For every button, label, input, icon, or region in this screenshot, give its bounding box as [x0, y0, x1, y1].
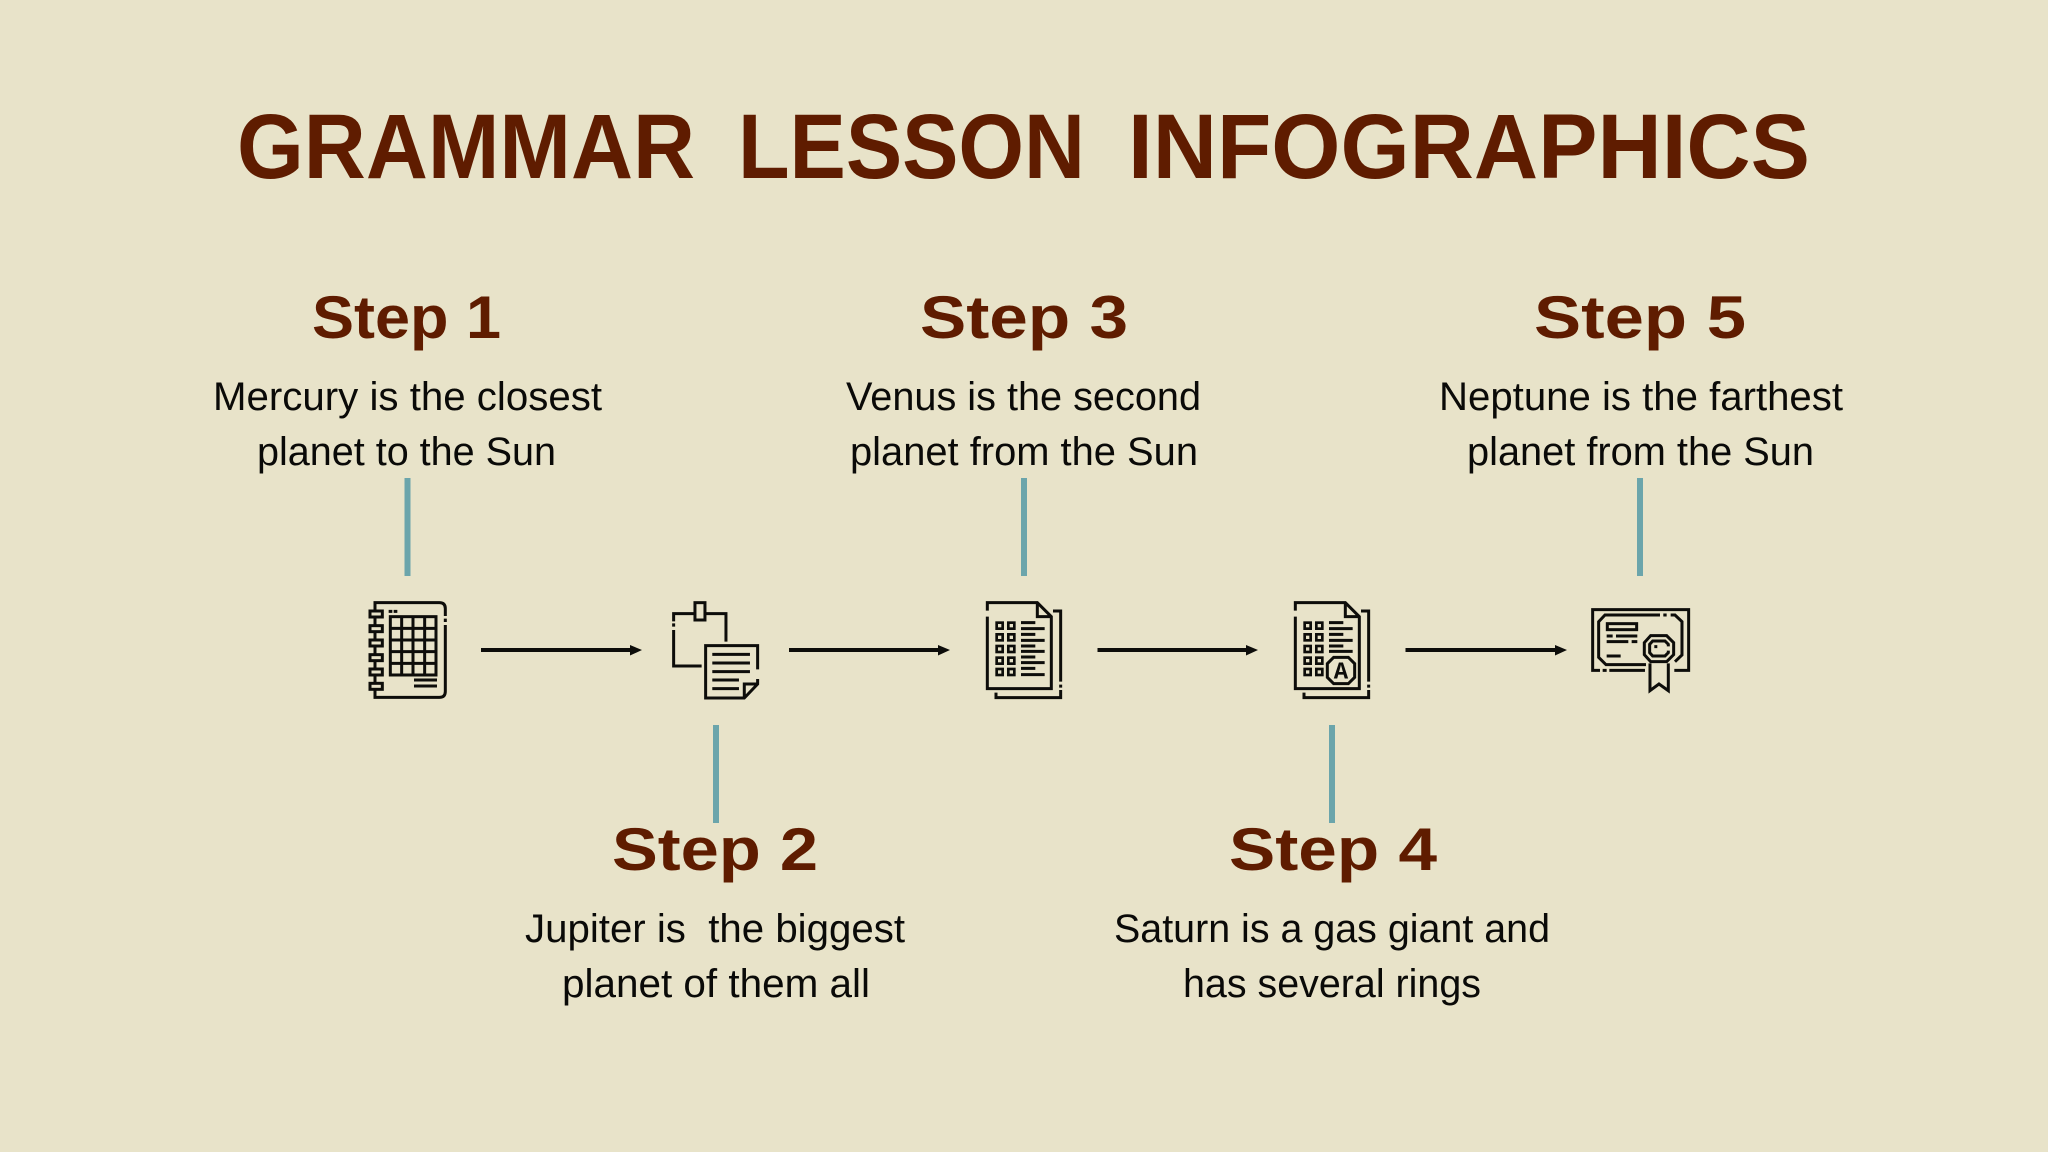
title: LESSON	[738, 96, 1085, 198]
step 5 block: Neptune is the farthest	[1439, 375, 1843, 419]
step 1 block: Step 1	[312, 284, 501, 351]
step 3 block: Step 3	[920, 284, 1128, 351]
icon: graded document: A	[1334, 660, 1349, 687]
step 2 block: planet of them all	[562, 962, 870, 1006]
step 3 block: Venus is the second	[846, 375, 1201, 419]
icon: graded document	[1295, 603, 1369, 698]
step 1 block: Mercury is the closest	[213, 375, 602, 419]
step 5 block: Step 5	[1534, 284, 1746, 351]
step 1 block: planet to the Sun	[257, 430, 556, 474]
icon: clipped notes	[674, 603, 758, 698]
arrow: step 1 to step 2	[481, 645, 642, 656]
step 4 block: Step 4	[1229, 816, 1438, 883]
step 2 block	[525, 816, 905, 1006]
title	[237, 96, 1810, 198]
step 1 block	[213, 284, 602, 474]
connector: step 5	[1637, 478, 1643, 576]
title: INFOGRAPHICS	[1128, 96, 1810, 198]
connector: step 4	[1329, 725, 1335, 823]
step 4 block: has several rings	[1183, 962, 1481, 1006]
icon: certificate with seal	[1593, 610, 1689, 691]
arrow: step 4 to step 5	[1406, 645, 1567, 656]
connector: step 1	[404, 478, 410, 576]
step 3 block	[846, 284, 1201, 474]
icon: notebook with grid	[370, 603, 445, 697]
arrow: step 3 to step 4	[1098, 645, 1258, 656]
step 5 block: planet from the Sun	[1467, 430, 1814, 474]
step 5 block	[1439, 284, 1843, 474]
step 2 block: Step 2	[612, 816, 818, 883]
step 4 block: Saturn is a gas giant and	[1114, 907, 1550, 951]
step 2 block: Jupiter is the biggest	[525, 907, 905, 951]
icon: document with table	[987, 603, 1061, 698]
step 3 block: planet from the Sun	[850, 430, 1198, 474]
connector: step 2	[713, 725, 719, 823]
step 4 block	[1114, 816, 1550, 1006]
connector: step 3	[1021, 478, 1027, 576]
title: GRAMMAR	[237, 96, 695, 198]
arrow: step 2 to step 3	[789, 645, 950, 656]
